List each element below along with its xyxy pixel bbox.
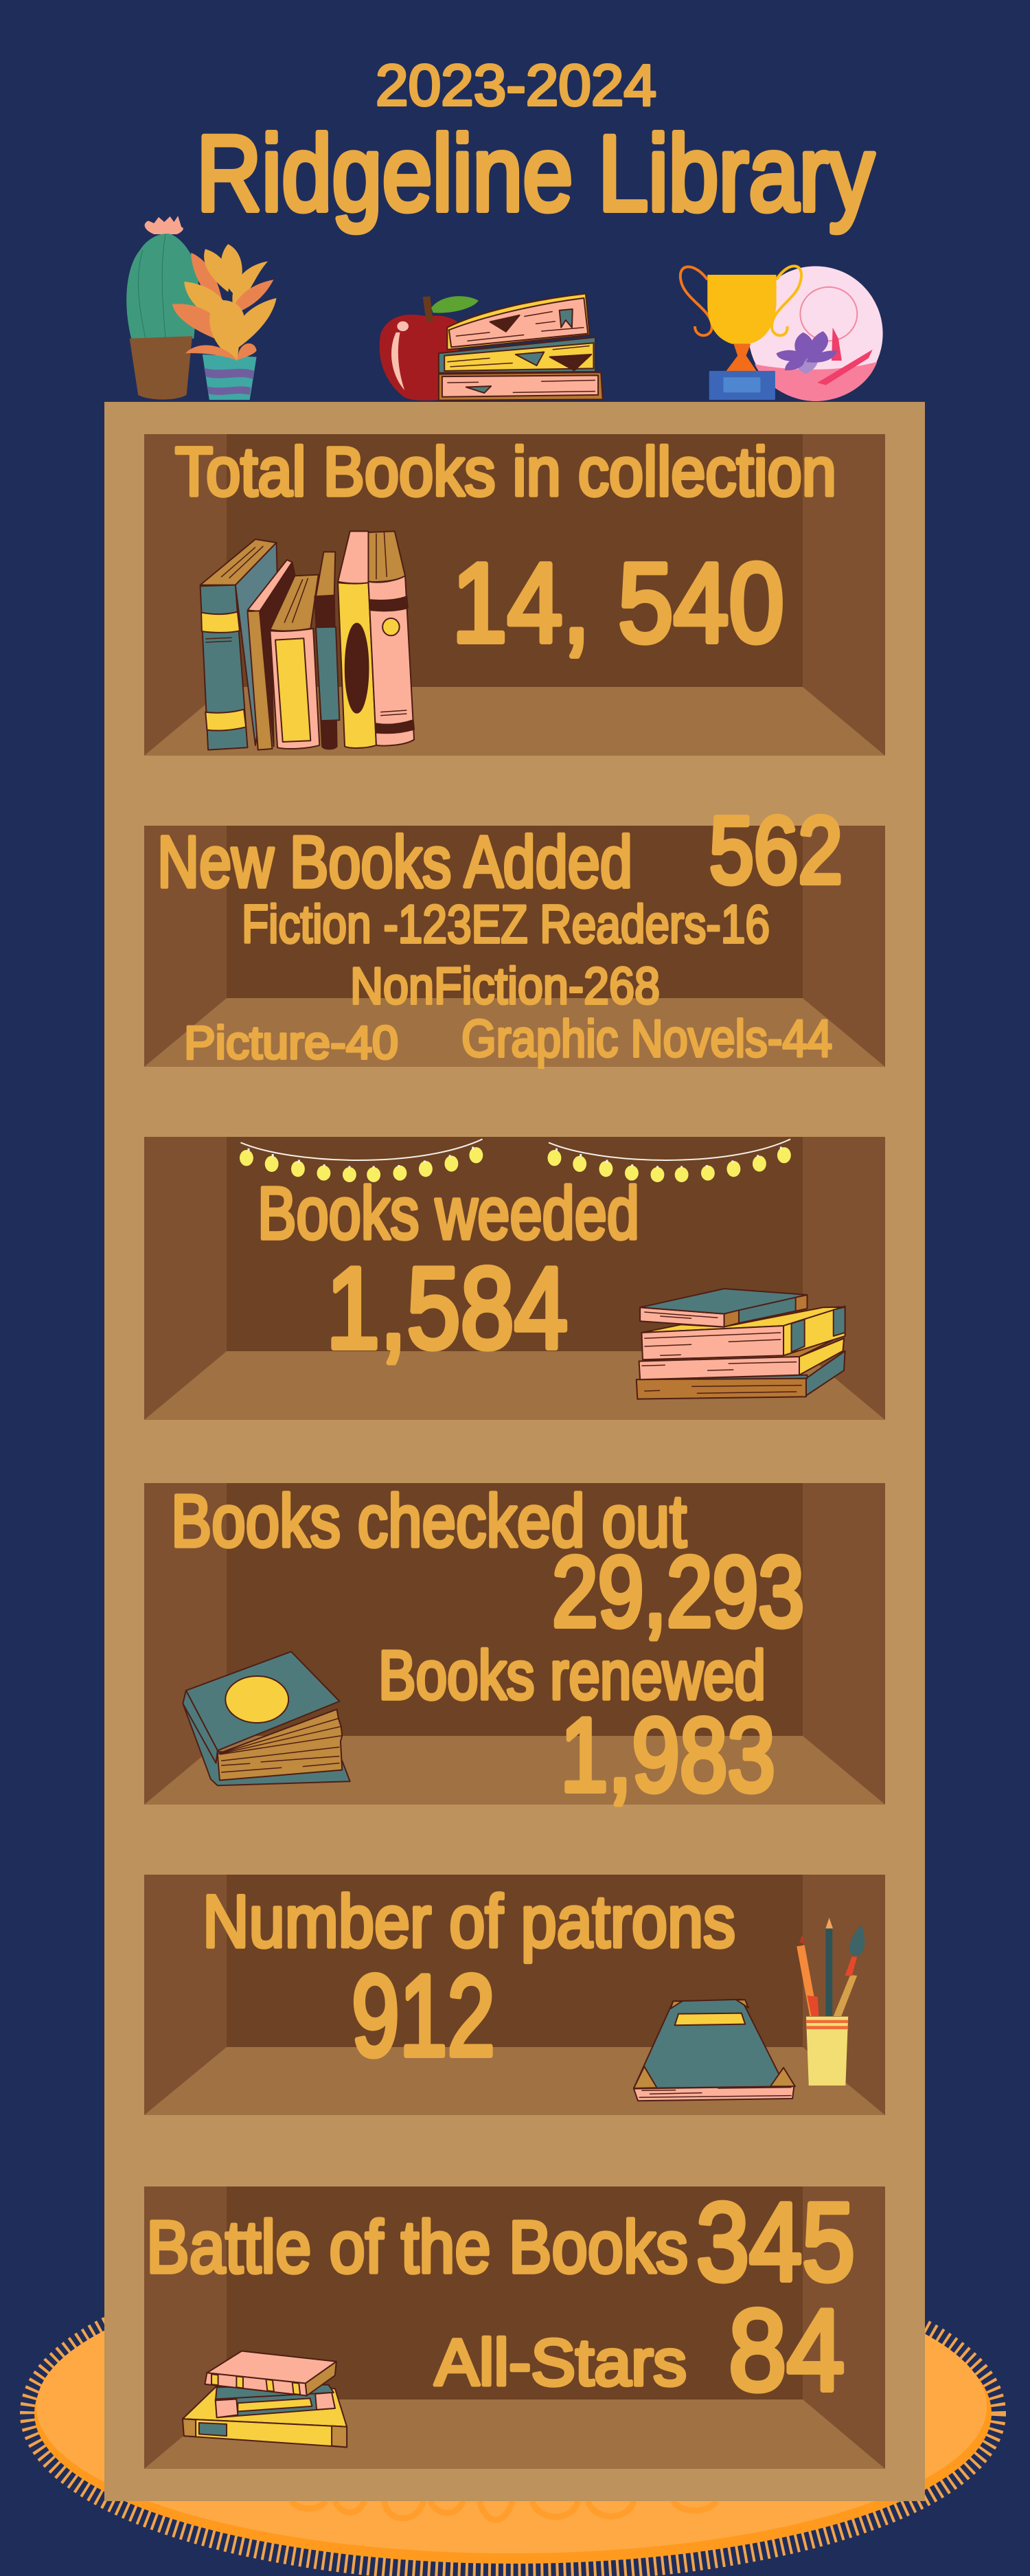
- icon: string lights right: [547, 1139, 791, 1182]
- icon: string lights left: [240, 1139, 483, 1182]
- text: books renewed value: 1,983: [560, 1697, 775, 1814]
- text: number of patrons label: Number of patrons: [203, 1879, 735, 1963]
- icon: book stack: [637, 1289, 845, 1399]
- icon: stacked books on top shelf: [439, 293, 603, 400]
- text: picture books: Picture-40: [184, 1017, 398, 1069]
- text: nonfiction: NonFiction-268: [350, 957, 660, 1015]
- subtitle: year: 2023-2024: [376, 53, 656, 117]
- rug: [30, 2254, 996, 2573]
- shelf 3 interior: [144, 1137, 885, 1420]
- icon: pencil cup: [797, 1918, 865, 2086]
- shelf 1 interior: [144, 434, 885, 756]
- title: Ridgeline Library: [196, 114, 874, 234]
- text: books checked out label: Books checked out: [171, 1479, 687, 1562]
- text: all-stars value: 84: [729, 2285, 845, 2415]
- text: new books added label: New Books Added: [157, 822, 632, 903]
- icon: red apple: [380, 296, 479, 400]
- text: all-stars label: All-Stars: [435, 2326, 687, 2399]
- text: fiction and EZ readers: Fiction -123EZ Readers-16: [242, 894, 770, 954]
- text: battle of the books label: Battle of the Books: [146, 2205, 688, 2288]
- text: books checked out value: 29,293: [552, 1536, 804, 1647]
- icon: gold trophy: [680, 266, 801, 400]
- text: books weeded value: 1,584: [326, 1243, 568, 1372]
- icon: closed teal book: [634, 2000, 795, 2101]
- text: books renewed label: Books renewed: [378, 1637, 766, 1714]
- text: books weeded label: Books weeded: [258, 1171, 639, 1254]
- bookcase frame: [104, 402, 925, 2501]
- shelf 6 interior: [144, 2187, 885, 2469]
- icon: cactus in pot: [126, 216, 198, 400]
- icon: orange leafy plant: [172, 244, 277, 400]
- icon: upright books: [201, 531, 414, 750]
- icon: terrarium globe: [748, 266, 883, 401]
- shelf 5 interior: [144, 1875, 885, 2115]
- text: battle of the books value: 345: [696, 2180, 855, 2304]
- text: number of patrons value: 912: [352, 1951, 495, 2080]
- text: new books value: 562: [709, 798, 843, 903]
- icon: open teal book: [183, 1651, 350, 1785]
- shelf 4 interior: [144, 1483, 885, 1805]
- text: graphic novels: Graphic Novels-44: [461, 1010, 832, 1068]
- icon: small book pile: [183, 2351, 347, 2448]
- text: total books value: 14, 540: [452, 540, 784, 666]
- text: total books label: Total Books in collection: [175, 433, 836, 510]
- shelf 2 interior: [144, 826, 885, 1067]
